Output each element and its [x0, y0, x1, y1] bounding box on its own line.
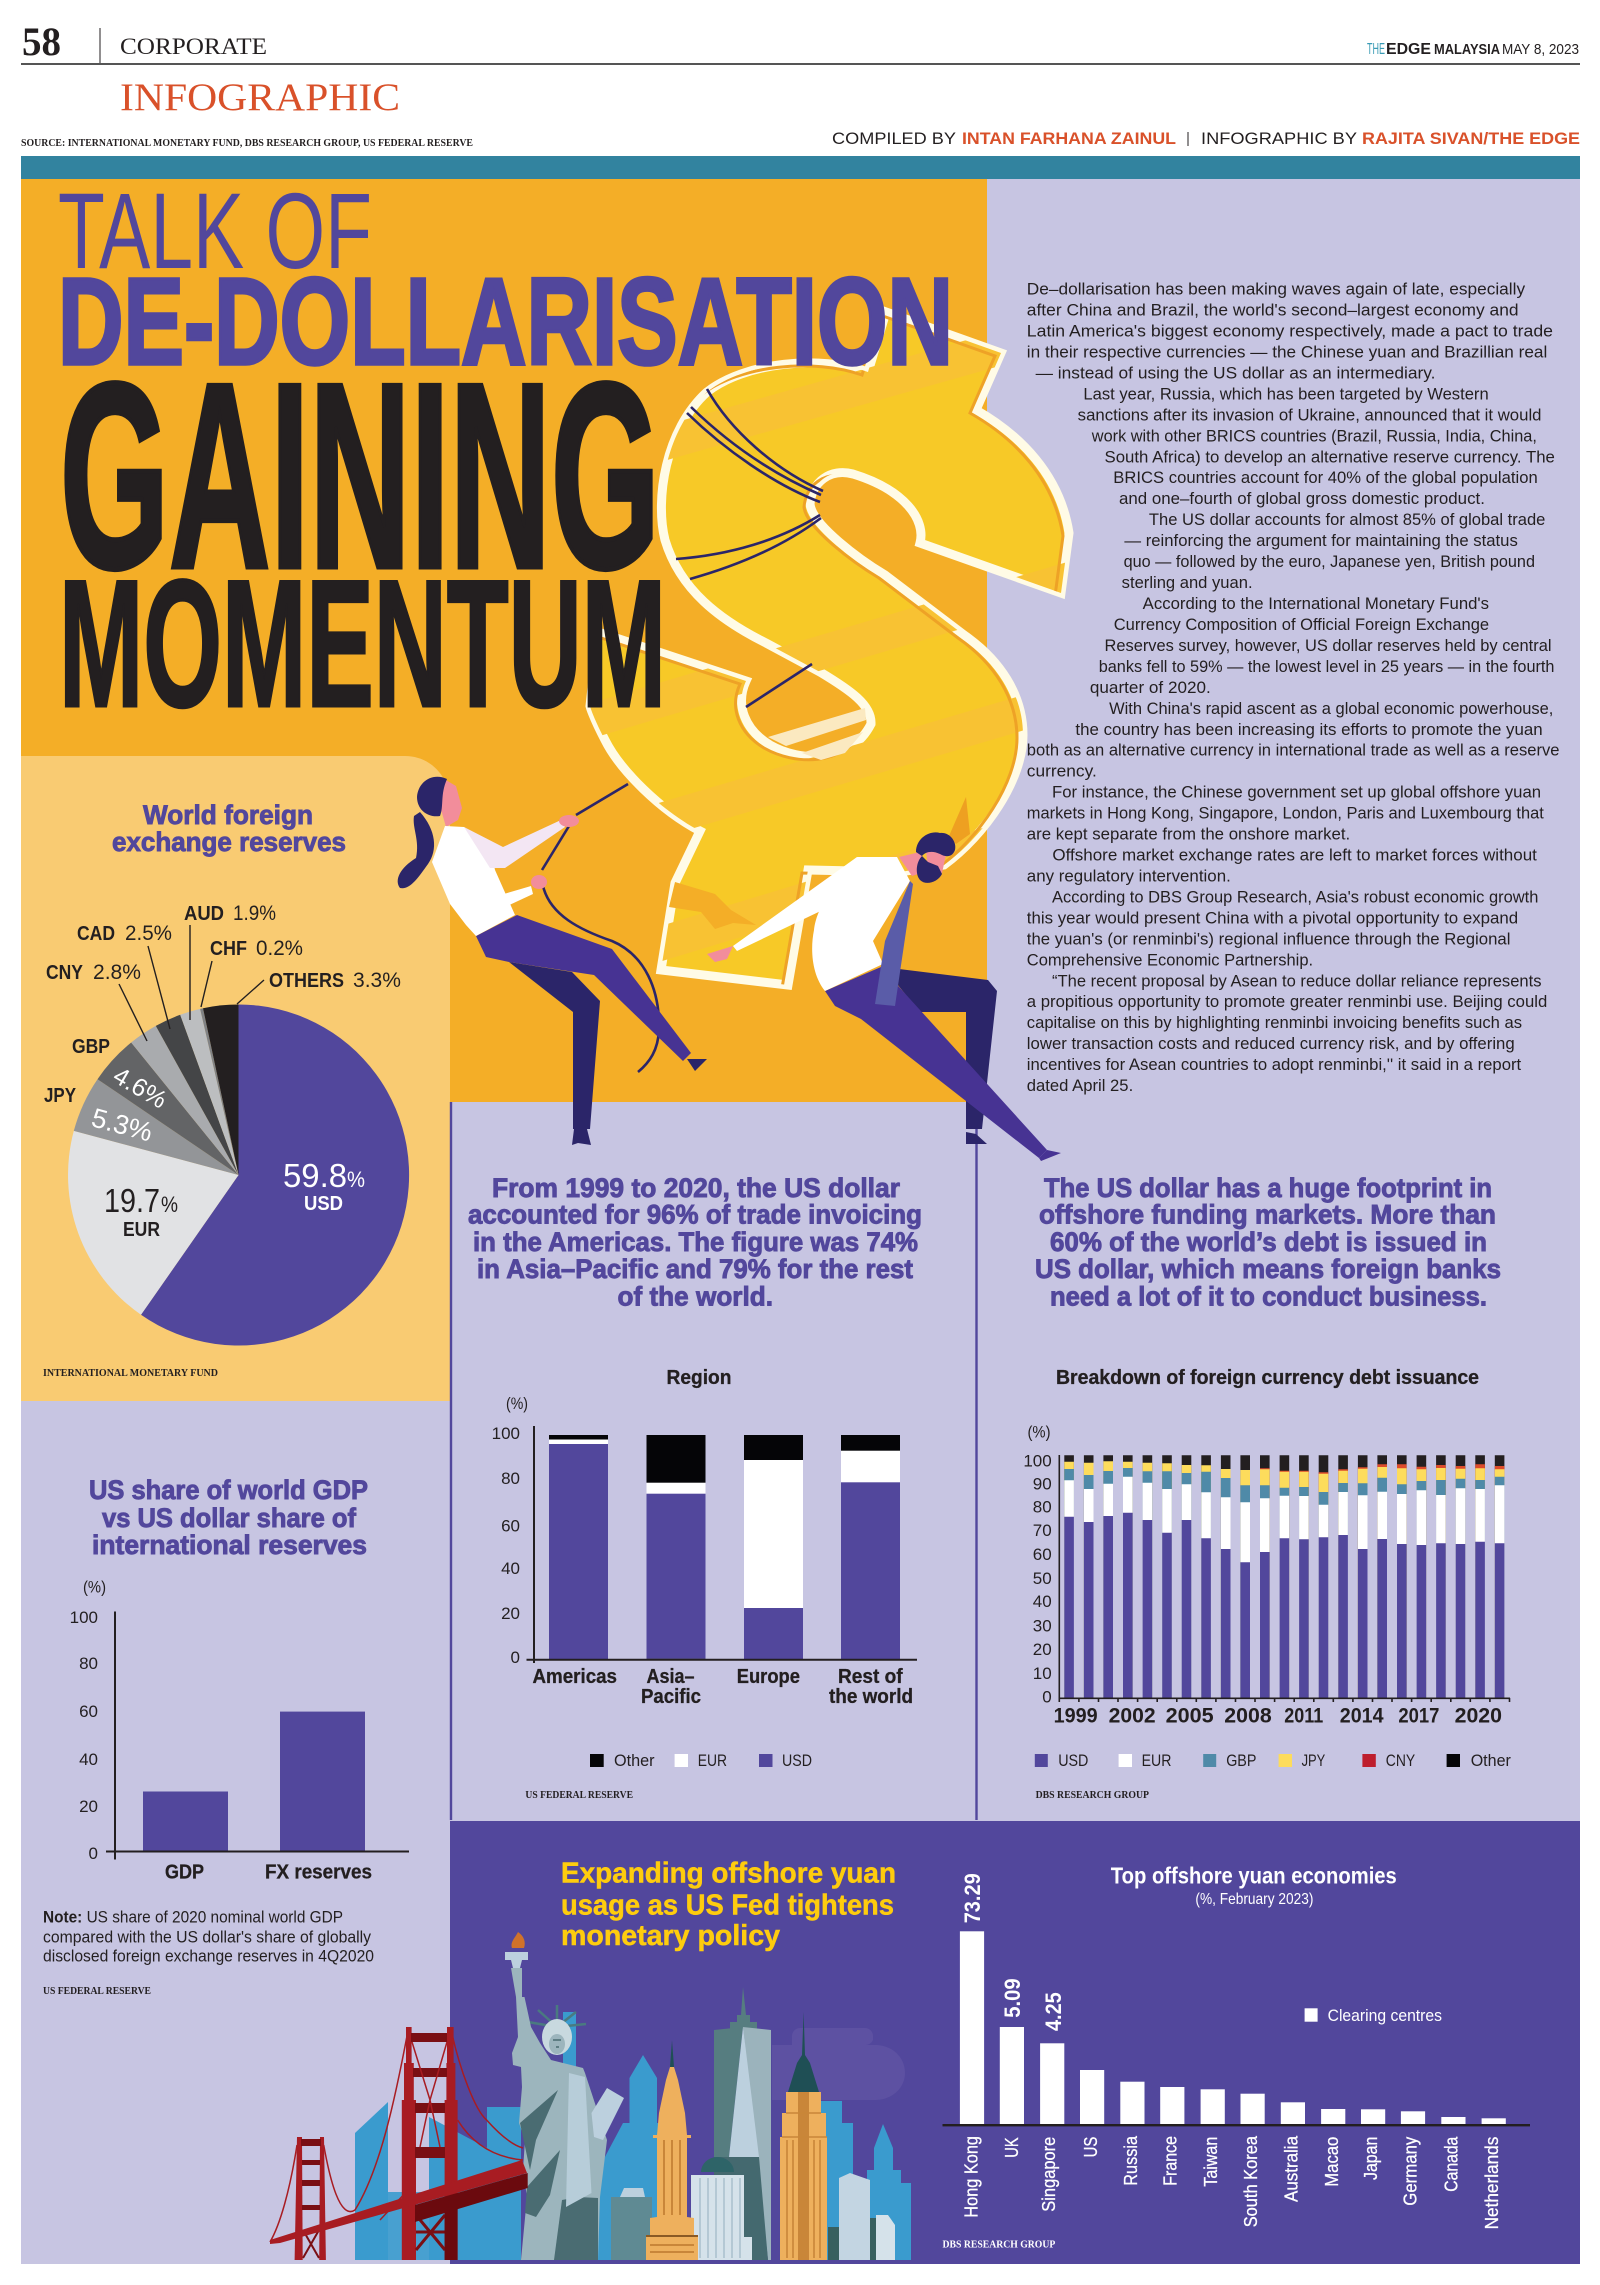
- heading: World foreign: [143, 800, 313, 830]
- article body text: work with other BRICS countries (Brazil, Russia, India, China,: [1091, 427, 1537, 445]
- masthead and date: EDGE: [1386, 41, 1431, 58]
- article body text: — instead of using the US dollar as an intermediary.: [1036, 364, 1436, 382]
- statement: [1035, 1173, 1501, 1312]
- bar chart: 20: [79, 1797, 98, 1816]
- hair: [417, 777, 447, 816]
- article body text: sterling and yuan.: [1122, 574, 1253, 592]
- stacked bar chart: (%): [1028, 1423, 1050, 1442]
- chrysler building: [646, 2040, 698, 2260]
- statement: of the world.: [618, 1282, 773, 1312]
- stacked bar chart: 2008: [1224, 1705, 1272, 1728]
- roadway: [270, 2160, 528, 2244]
- headline: [58, 171, 953, 745]
- legend: EUR: [1142, 1751, 1171, 1770]
- stacked bar chart: 2014: [1340, 1705, 1384, 1728]
- panel: offshore yuan: [450, 1821, 1580, 2264]
- stacked bar chart: (%): [506, 1394, 528, 1413]
- stacked bar chart: Europe: [737, 1666, 800, 1688]
- page header: [21, 19, 1580, 149]
- shirt: [432, 826, 515, 936]
- article body text: quarter of 2020.: [1090, 679, 1211, 697]
- heading: usage as US Fed tightens: [561, 1889, 894, 1921]
- heading: exchange reserves: [112, 827, 346, 857]
- book: [592, 2088, 624, 2140]
- bar chart: FX reserves: [265, 1862, 372, 1884]
- illustration: dollar sign: [560, 312, 1100, 988]
- article body text: capitalise on this by highlighting renminbi invoicing benefits such as: [1027, 1014, 1522, 1032]
- bar chart: Singapore: [1039, 2137, 1059, 2212]
- panel: world foreign exchange reserves: [21, 756, 450, 1401]
- small tower: [295, 2137, 326, 2260]
- statement: offshore funding markets. More than: [1039, 1200, 1496, 1230]
- article body text: BRICS countries account for 40% of the global population: [1113, 469, 1538, 487]
- source: US FEDERAL RESERVE: [525, 1790, 633, 1801]
- article body text: any regulatory intervention.: [1027, 868, 1231, 886]
- stacked bar chart: Pacific: [641, 1686, 701, 1708]
- pie labels: 5.3%: [88, 1103, 156, 1147]
- stacked bar chart: 0: [511, 1648, 520, 1667]
- chart title: Top offshore yuan economies: [1111, 1862, 1397, 1888]
- pie labels: 1.9%: [233, 902, 276, 925]
- pie labels: CHF: [210, 938, 247, 960]
- pie leader lines: [119, 925, 264, 1041]
- statue of liberty: [505, 1932, 624, 2260]
- pie labels: 4.6%: [108, 1062, 172, 1114]
- stacked bar chart: 90: [1033, 1474, 1052, 1493]
- sources: SOURCE: INTERNATIONAL MONETARY FUND, DBS RESEARCH GROUP, US FEDERAL RESERVE: [21, 138, 473, 149]
- bar chart: [942, 1873, 1530, 2229]
- lower arm: [466, 886, 533, 925]
- blue skyline: [355, 2012, 911, 2260]
- article body text: sanctions after its invasion of Ukraine, announced that it would: [1078, 406, 1542, 424]
- article body text: markets in Hong Kong, Singapore, London, Paris and Luxembourg that: [1027, 805, 1544, 823]
- ponytail: [398, 812, 434, 888]
- crown rays: [528, 2005, 586, 2027]
- pie labels: EUR: [123, 1219, 160, 1241]
- statement: 60% of the world’s debt is issued in: [1050, 1227, 1487, 1257]
- heading: international reserves: [92, 1530, 367, 1560]
- pie labels: USD: [304, 1193, 343, 1215]
- masthead and date: MALAYSIA: [1434, 41, 1500, 58]
- stacked bar chart: 10: [1033, 1664, 1052, 1683]
- panel: trade invoicing by region: [468, 1173, 922, 1801]
- masthead and date: MAY 8, 2023: [1502, 41, 1579, 58]
- stacked bar chart: 60: [501, 1517, 520, 1536]
- article body text: the country has been increasing its efforts to promote the yuan: [1075, 721, 1543, 739]
- source: US FEDERAL RESERVE: [43, 1986, 151, 1997]
- faint cloud: [772, 2028, 905, 2100]
- pie labels: OTHERS: [269, 970, 344, 992]
- article body text: incentives for Asean countries to adopt renminbi,'' it said in a report: [1027, 1056, 1522, 1074]
- legend: GBP: [1226, 1751, 1256, 1770]
- bar chart: Macao: [1322, 2137, 1342, 2187]
- article body text: in their respective currencies — the Chinese yuan and Brazillian real: [1027, 344, 1547, 362]
- pie labels: GBP: [72, 1036, 110, 1058]
- teal banner bar: [21, 156, 1580, 179]
- pie labels: CAD: [77, 923, 115, 945]
- bar chart: Australia: [1281, 2135, 1301, 2202]
- headline: talk of: TALK OF: [58, 171, 372, 291]
- hand: [707, 946, 733, 962]
- masthead and date: THE: [1367, 41, 1385, 58]
- bar chart: UK: [1002, 2137, 1022, 2158]
- illustration: woman pulling rope: [398, 777, 707, 1145]
- bar chart: Germany: [1400, 2137, 1420, 2206]
- article body text: this year would present China with a pivotal opportunity to expand: [1027, 909, 1518, 927]
- pie labels: AUD: [184, 903, 224, 925]
- stacked bar chart: 40: [1033, 1592, 1052, 1611]
- bar chart: Russia: [1121, 2135, 1141, 2186]
- stacked bar chart: 80: [1033, 1497, 1052, 1516]
- article body text: dated April 25.: [1027, 1077, 1133, 1095]
- illustration: city skyline: [270, 1932, 911, 2260]
- stacked bar chart: 20: [1033, 1640, 1052, 1659]
- stacked bar chart: 100: [1023, 1452, 1052, 1471]
- masthead and date: [1367, 41, 1579, 58]
- bar chart: US: [1081, 2137, 1101, 2157]
- stacked bar chart: 20: [501, 1604, 520, 1623]
- article body text: the yuan's (or renminbi's) regional influence through the Regional: [1027, 930, 1511, 948]
- tie: [875, 881, 913, 1006]
- golden gate bridge: [270, 2027, 528, 2260]
- stacked bar chart: 100: [492, 1424, 520, 1443]
- headline: de-dollarisation: DE-DOLLARISATION: [58, 254, 953, 391]
- heading: [112, 800, 346, 857]
- article body text: — reinforcing the argument for maintaining the status: [1124, 532, 1518, 550]
- article body text: De–dollarisation has been making waves again of late, especially: [1027, 281, 1526, 299]
- heading: vs US dollar share of: [102, 1503, 357, 1533]
- note: disclosed foreign exchange reserves in 4Q2020: [43, 1946, 374, 1966]
- credits: INTAN FARHANA ZAINUL: [962, 129, 1176, 148]
- note: compared with the US dollar's share of globally: [43, 1928, 371, 1946]
- arm: [733, 857, 880, 951]
- panel dividers: [451, 1102, 976, 1820]
- bar chart: 60: [79, 1702, 98, 1721]
- article body text: For instance, the Chinese government set up global offshore yuan: [1052, 784, 1541, 802]
- stacked bar chart: Rest of: [838, 1666, 903, 1688]
- statement: The US dollar has a huge footprint in: [1044, 1173, 1492, 1203]
- statement: [468, 1173, 922, 1312]
- stacked bar chart: 1999: [1054, 1705, 1098, 1728]
- bar chart: Hong Kong: [962, 2136, 982, 2218]
- pie labels: 0.2%: [256, 937, 303, 960]
- bar chart: 73.29: [960, 1873, 985, 1923]
- pie labels: JPY: [44, 1085, 77, 1107]
- stacked bar chart: the world: [829, 1686, 913, 1708]
- stacked bar chart: [492, 1394, 917, 1708]
- empire state building: [780, 2012, 827, 2260]
- bar chart: 80: [79, 1654, 98, 1673]
- stacked bar chart: 40: [501, 1559, 520, 1578]
- article body text: both as an alternative currency in international trade as well as a reserve: [1027, 742, 1560, 760]
- chart title: Breakdown of foreign currency debt issuance: [1056, 1367, 1479, 1389]
- stacked bar chart: 2020: [1455, 1705, 1502, 1728]
- statement: in Asia–Pacific and 79% for the rest: [477, 1254, 913, 1284]
- legend: [590, 1751, 812, 1770]
- bar chart: Taiwan: [1201, 2137, 1221, 2187]
- one world trade center: [714, 1987, 771, 2260]
- page number: 58: [22, 19, 61, 64]
- stacked bar chart: 70: [1033, 1521, 1052, 1540]
- bar chart: Canada: [1442, 2136, 1462, 2192]
- pie labels: [44, 902, 401, 1241]
- bar chart: Japan: [1361, 2137, 1381, 2180]
- robe: [511, 1968, 607, 2260]
- stacked bar chart: 2002: [1109, 1705, 1156, 1728]
- article body text: [1027, 281, 1560, 1095]
- shirt: [812, 857, 910, 991]
- illustration: man pulling dollar sign: [707, 832, 1061, 1161]
- legend: CNY: [1386, 1751, 1415, 1770]
- legend: USD: [782, 1751, 812, 1770]
- rear shoe: [572, 1129, 591, 1145]
- article body text: after China and Brazil, the world's second–largest economy and: [1027, 302, 1519, 320]
- chart subtitle: (%, February 2023): [1195, 1891, 1313, 1908]
- small right towers: [828, 2173, 895, 2260]
- headline: gaining: GAINING: [60, 328, 660, 623]
- credits: [832, 129, 1580, 148]
- front shoe: [1039, 1150, 1061, 1161]
- pie labels: 19.7: [104, 1182, 160, 1219]
- bar chart: South Korea: [1241, 2135, 1261, 2227]
- article body text: lower transaction costs and reduced currency risk, and by offering: [1027, 1035, 1515, 1053]
- rear shoe: [966, 1132, 987, 1144]
- article body text: The US dollar accounts for almost 85% of global trade: [1149, 511, 1545, 529]
- heading: [89, 1475, 368, 1560]
- article body text: Last year, Russia, which has been targeted by Western: [1083, 385, 1489, 403]
- article body text: Comprehensive Economic Partnership.: [1027, 951, 1313, 969]
- article body text: According to DBS Group Research, Asia's robust economic growth: [1052, 888, 1538, 906]
- stacked bar chart: 0: [1042, 1688, 1052, 1707]
- bar chart: 5.09: [1000, 1978, 1025, 2018]
- pie labels: 59.8: [283, 1157, 347, 1194]
- torch flame: [512, 1932, 525, 1948]
- stacked bar chart: Asia–: [646, 1666, 694, 1688]
- front leg: [825, 967, 1047, 1158]
- legend: EUR: [698, 1751, 727, 1770]
- panel: orange hero: [21, 179, 987, 1102]
- rear leg: [509, 962, 600, 1129]
- white glass tower: [691, 2157, 752, 2260]
- cables: [270, 2028, 523, 2242]
- stacked bar chart: 2011: [1284, 1705, 1324, 1728]
- article body text: Latin America's biggest economy respectively, made a pact to trade: [1027, 322, 1553, 340]
- panel: US share of GDP vs reserves: [43, 1475, 409, 1997]
- head: [542, 2019, 572, 2055]
- legend: Other: [614, 1751, 655, 1770]
- hair and beard: [916, 832, 955, 883]
- bar chart: [70, 1578, 409, 1884]
- legend: [1035, 1751, 1511, 1770]
- article body text: Currency Composition of Official Foreign Exchange: [1114, 616, 1489, 634]
- pie labels: %: [161, 1192, 178, 1217]
- statement: need a lot of it to conduct business.: [1050, 1282, 1487, 1312]
- article body text: South Africa) to develop an alternative reserve currency. The: [1104, 448, 1555, 466]
- article body text: According to the International Monetary Fund's: [1143, 595, 1489, 613]
- stacked bar chart: 60: [1033, 1545, 1052, 1564]
- heading: [561, 1857, 896, 1952]
- legend: Clearing centres: [1328, 2006, 1442, 2025]
- article body text: Offshore market exchange rates are left to market forces without: [1052, 846, 1537, 864]
- bar chart: GDP: [165, 1862, 204, 1884]
- rear leg: [883, 967, 997, 1129]
- pie labels: 2.5%: [125, 922, 172, 945]
- heading: US share of world GDP: [89, 1475, 368, 1505]
- bar chart: 0: [89, 1844, 98, 1863]
- bar chart: (%): [83, 1578, 106, 1597]
- source: INTERNATIONAL MONETARY FUND: [43, 1368, 218, 1379]
- section title: INFOGRAPHIC: [120, 76, 400, 119]
- pie labels: 2.8%: [93, 961, 141, 984]
- stacked bar chart: 30: [1033, 1617, 1052, 1636]
- bar chart: 40: [79, 1750, 98, 1769]
- statement: accounted for 96% of trade invoicing: [468, 1200, 922, 1230]
- face: [926, 850, 946, 873]
- stacked bar chart: 80: [501, 1469, 520, 1488]
- statement: in the Americas. The figure was 74%: [473, 1227, 918, 1257]
- big tower: [402, 2027, 458, 2260]
- pie labels: 3.3%: [353, 969, 401, 992]
- teal tower: [611, 2188, 652, 2260]
- section label: CORPORATE: [120, 34, 267, 59]
- legend: JPY: [1302, 1751, 1325, 1770]
- bar chart: Netherlands: [1482, 2137, 1502, 2229]
- source: DBS RESEARCH GROUP: [1036, 1790, 1150, 1801]
- neck: [899, 852, 930, 876]
- bar chart: 100: [70, 1608, 98, 1627]
- pie labels: %: [347, 1167, 365, 1192]
- stacked bar chart: 2005: [1166, 1705, 1214, 1728]
- credits: RAJITA SIVAN/THE EDGE: [1362, 129, 1580, 148]
- note: [43, 1908, 374, 1966]
- article body text: Reserves survey, however, US dollar reserves held by central: [1104, 637, 1552, 655]
- credits: COMPILED BY: [832, 129, 956, 148]
- bar chart: France: [1161, 2136, 1181, 2186]
- statement: From 1999 to 2020, the US dollar: [492, 1173, 900, 1203]
- torch: [505, 1952, 528, 1968]
- article body text: currency.: [1027, 763, 1097, 781]
- stacked bar chart: [1023, 1423, 1510, 1728]
- pie labels: CNY: [46, 962, 84, 984]
- heading: Expanding offshore yuan: [561, 1857, 896, 1889]
- chart title: Region: [666, 1367, 732, 1389]
- article body text: are kept separate from the onshore market.: [1027, 826, 1350, 844]
- face: [440, 779, 462, 827]
- pie chart: [68, 1004, 409, 1345]
- front leg: [476, 915, 691, 1061]
- robe folds: [554, 2197, 598, 2260]
- heading: monetary policy: [561, 1920, 780, 1952]
- article body text: With China's rapid ascent as a global economic powerhouse,: [1109, 700, 1553, 718]
- article body text: “The recent proposal by Asean to reduce dollar reliance represents: [1052, 972, 1542, 990]
- headline: momentum: MOMENTUM: [59, 543, 666, 745]
- legend: Other: [1471, 1751, 1511, 1770]
- article body text: and one–fourth of global gross domestic product.: [1119, 490, 1485, 508]
- bar chart: 4.25: [1041, 1992, 1066, 2031]
- upper arm: [464, 820, 565, 868]
- front shoe: [687, 1059, 707, 1071]
- article body text: banks fell to 59% — the lowest level in 25 years — in the fourth: [1099, 658, 1554, 676]
- statement: US dollar, which means foreign banks: [1035, 1254, 1501, 1284]
- stacked bar chart: Americas: [532, 1666, 617, 1688]
- panel: foreign currency debt: [1023, 1173, 1511, 1801]
- stacked bar chart: 50: [1033, 1569, 1052, 1588]
- hands: [531, 815, 579, 889]
- credits: INFOGRAPHIC BY: [1201, 129, 1357, 148]
- article body text: quo — followed by the euro, Japanese yen, British pound: [1124, 553, 1535, 571]
- source: DBS RESEARCH GROUP: [942, 2240, 1056, 2251]
- legend: USD: [1058, 1751, 1088, 1770]
- stacked bar chart: 2017: [1398, 1705, 1439, 1728]
- article body text: a propitious opportunity to promote greater renminbi use. Beijing could: [1027, 993, 1547, 1011]
- ropes on dollar sign: [542, 389, 823, 1072]
- note: Note: US share of 2020 nominal world GDP: [43, 1908, 343, 1927]
